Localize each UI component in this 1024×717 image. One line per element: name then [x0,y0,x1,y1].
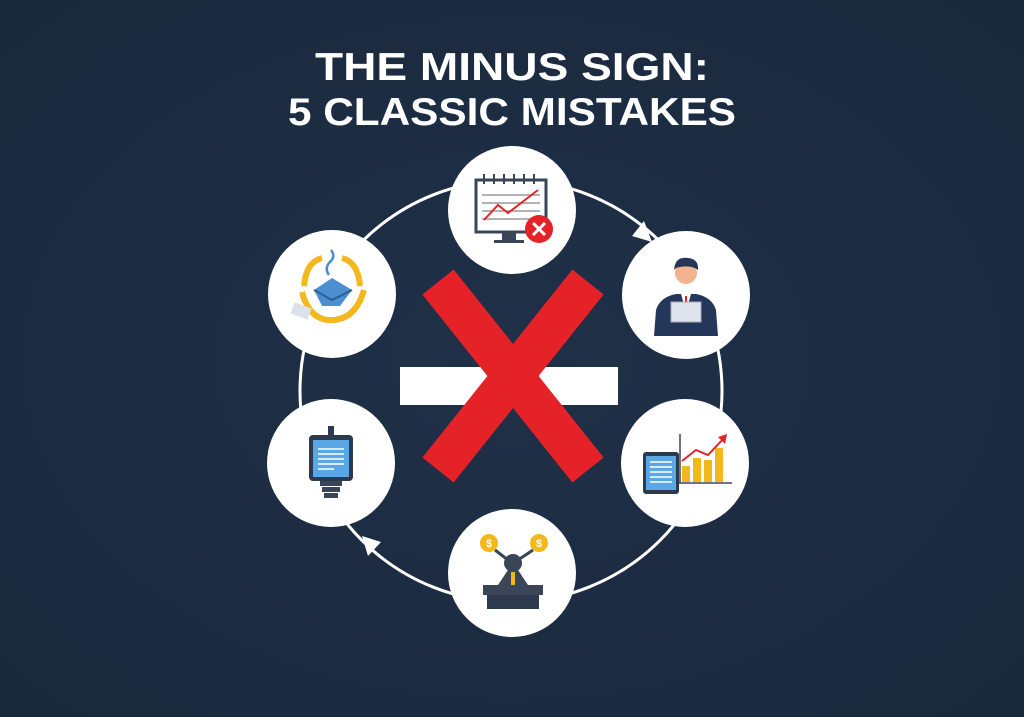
node 4: money machine [448,509,576,637]
node 5: tablet bulb [267,399,395,527]
arrow: top-right [632,221,652,242]
title: 5 CLASSIC MISTAKES [288,91,736,134]
arrow: bottom-left [362,536,381,556]
node 6: hands holding box [268,230,396,358]
title [288,46,736,134]
title: THE MINUS SIGN: [315,46,709,89]
node 1: chart error monitor [448,146,576,274]
node 4: money machine: $ [536,538,542,550]
node 3: tablet with growth chart [621,399,749,527]
node 2: businessman reading [622,231,750,359]
minus bar [400,367,618,405]
red X [438,282,588,470]
cycle ring [300,180,722,602]
node 4: money machine: $ [486,538,492,550]
